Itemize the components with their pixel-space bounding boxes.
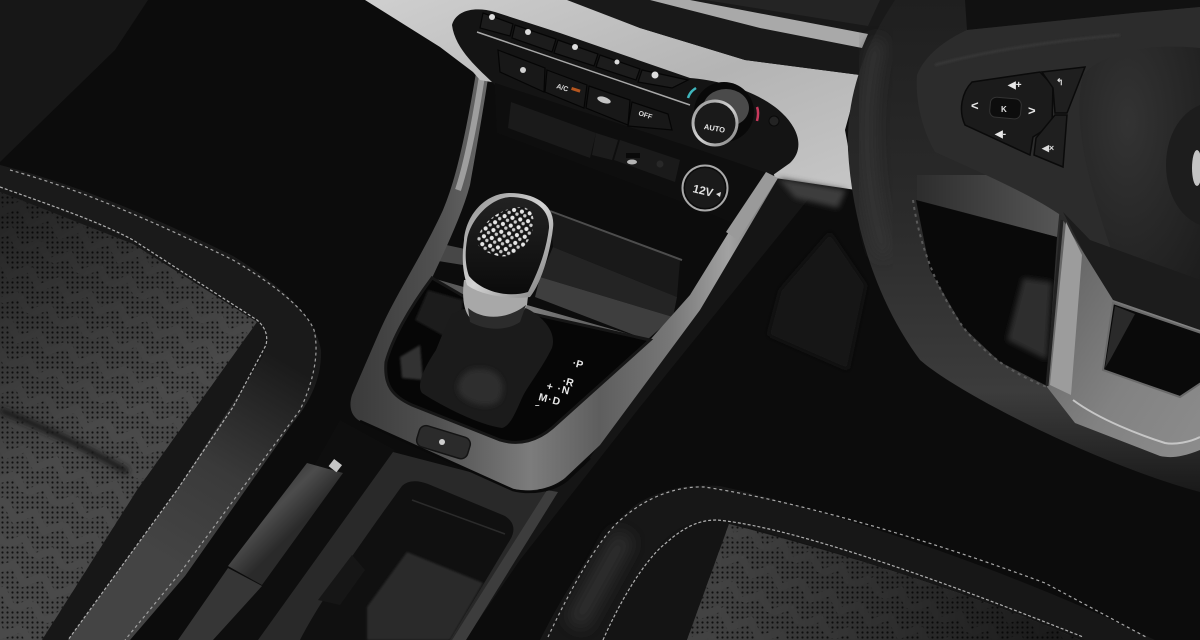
icon 1: [489, 14, 495, 20]
right arrow: >: [1028, 103, 1036, 118]
dark area above spoke pod: [965, 0, 1200, 30]
cup holder: [300, 481, 513, 640]
recirculation icon: [596, 95, 612, 105]
left arrow: <: [971, 98, 979, 113]
button 3: [554, 40, 598, 66]
opening inner side: [1105, 306, 1135, 368]
spoke silver strip: [1050, 222, 1082, 395]
bezel body: [350, 73, 778, 490]
footwell side panel: [768, 232, 866, 370]
gloss reflection: [400, 345, 423, 380]
button 4: [596, 55, 640, 80]
console upper cavity: [432, 75, 778, 345]
well upper left cavity: [415, 290, 463, 345]
right silver rail top: [726, 172, 778, 240]
USB block: [614, 140, 680, 182]
tray top line: [550, 211, 682, 260]
bottom button row: [498, 50, 672, 130]
perforation chevrons: [0, 192, 257, 640]
storage slot: [508, 102, 596, 158]
AC label: A/C: [555, 83, 569, 94]
cup holder floor: [367, 552, 483, 640]
dial cap: [694, 102, 736, 144]
ledge left of knob: [432, 243, 465, 265]
gear well: [386, 278, 650, 442]
tray lower band: [535, 277, 673, 340]
knob black body: [466, 197, 549, 294]
left rail highlight: [458, 76, 482, 190]
off label: OFF: [637, 110, 654, 121]
panel shading: [0, 192, 257, 640]
right seat dark strip: [602, 520, 1085, 640]
gear knob: [463, 193, 553, 329]
cushion seam shadow: [0, 410, 128, 472]
spoke pod: [917, 7, 1200, 300]
perforation dots: [0, 192, 257, 640]
rim highlight: [867, 40, 885, 255]
silver strip: [650, 0, 868, 48]
socket ring: [682, 166, 728, 210]
fan button: [498, 50, 545, 92]
button icon: [439, 439, 445, 445]
aux port: [656, 160, 664, 168]
lever tip: [329, 459, 342, 472]
spoke bright lower line: [1073, 400, 1200, 444]
lever handle: [228, 463, 343, 585]
icon 2: [525, 29, 531, 35]
dial shadow: [694, 82, 754, 142]
dashboard light trim: [365, 0, 860, 190]
parking sensor button: [415, 424, 472, 460]
top button row: [480, 13, 688, 88]
temperature dial: [692, 82, 754, 146]
dial ring: [692, 100, 738, 146]
label M D: M·D: [537, 391, 562, 408]
off button: [628, 102, 672, 130]
small sensor: [769, 116, 779, 126]
USB port: [626, 153, 640, 158]
call accept icon: ↰: [1056, 77, 1064, 87]
steering wheel: [848, 0, 1200, 492]
gear gaiter: [420, 303, 553, 428]
dial label: AUTO: [703, 122, 726, 135]
button 5: [638, 70, 688, 88]
outer stitching: [10, 170, 316, 640]
button body: [415, 424, 472, 460]
hub dome: [1079, 47, 1200, 300]
warm indicator: [757, 107, 758, 121]
panel black body: [452, 9, 798, 225]
label R: ·R: [561, 375, 575, 390]
rim stitching: [913, 200, 1047, 387]
cup holder side notch: [318, 555, 365, 605]
handbrake lever: [178, 459, 343, 640]
centre mode button: [989, 97, 1022, 119]
console top surface: [258, 452, 547, 640]
right panel shading: [687, 524, 1080, 640]
badge edge: [1192, 150, 1200, 186]
seat outer bolster: [0, 165, 321, 640]
shift pattern: [535, 357, 584, 410]
wheel rim: [848, 0, 1200, 492]
top row icons: [489, 14, 658, 78]
dial barrel: [703, 89, 749, 127]
gaiter highlight: [458, 369, 503, 405]
silver and grey console bezel: [350, 73, 778, 492]
mode label: K: [1001, 105, 1007, 114]
top right control: [1042, 67, 1085, 113]
bezel bottom edge: [360, 421, 590, 492]
tray recess: [550, 212, 680, 297]
12V socket: [682, 166, 728, 210]
cool indicator: [688, 88, 696, 98]
grey dash through wheel: [917, 175, 1063, 237]
hub lower band: [1063, 212, 1200, 330]
icon 5: [652, 72, 658, 78]
inner stitching: [0, 187, 267, 640]
bottom right control: [1034, 115, 1067, 167]
pod top highlight: [935, 35, 1120, 65]
right seat inner stitching: [603, 520, 1083, 640]
dash underside: [778, 178, 846, 208]
tray middle face: [540, 247, 677, 317]
seat corner top left: [0, 0, 148, 162]
knob dot pattern: [477, 207, 534, 256]
AC button: [545, 70, 587, 108]
silver collar: [463, 280, 530, 323]
pedal: [1007, 278, 1052, 360]
button 1: [480, 13, 513, 36]
switch block: [592, 133, 618, 160]
label P: ·P: [571, 357, 584, 371]
console right face: [450, 178, 810, 640]
glossy black opening: [386, 278, 650, 442]
bolster highlight: [575, 535, 625, 625]
right seat: [540, 486, 1155, 640]
fabric edge strip: [452, 490, 558, 640]
fan icon: [520, 67, 526, 73]
collar shadow: [468, 305, 526, 329]
socket cap: [685, 168, 725, 208]
USB icon: [627, 160, 637, 164]
right panel chevrons: [687, 524, 1080, 640]
recirculation button: [586, 86, 630, 125]
left control pad: [961, 72, 1053, 155]
climate control panel: [452, 9, 798, 225]
icon 3: [572, 44, 578, 50]
lower console: [215, 420, 558, 640]
upper dash dark panel: [567, 0, 900, 75]
volume up label: ◀+: [1007, 80, 1022, 91]
recess beside lever: [215, 420, 395, 640]
lower panel: [495, 83, 773, 225]
lever boot: [178, 568, 262, 640]
left seat: [0, 165, 321, 640]
right seat bolster: [540, 486, 1155, 640]
steering controls: [961, 67, 1085, 167]
inner dark strip: [0, 187, 266, 640]
mute icon: ◀×: [1041, 143, 1054, 153]
perforated upper panel base: [0, 192, 257, 640]
hub centre recess: [1166, 103, 1200, 227]
dark panel: [567, 0, 900, 75]
right panel dots: [687, 524, 1080, 640]
AC indicator: [571, 87, 581, 93]
knob silver shell: [463, 193, 553, 298]
lower spoke body: [1047, 220, 1200, 457]
volume down label: ◀-: [994, 129, 1006, 140]
perforated right panel base: [687, 524, 1080, 640]
button 2: [512, 25, 556, 52]
cup holder inner rim: [412, 500, 505, 534]
spoke dark edge: [1047, 220, 1062, 386]
icon 4: [614, 60, 620, 64]
tray and storage ledge: [432, 211, 682, 340]
label plus N: + ·N: [545, 380, 572, 398]
socket label: 12V: [691, 183, 714, 200]
spoke opening: [1103, 303, 1200, 397]
right seat outer stitching: [548, 487, 1146, 637]
chrome accent strip: [477, 32, 690, 105]
label minus: –: [535, 401, 540, 410]
footwell opening: [916, 200, 1057, 386]
dark upper surface: [705, 0, 880, 26]
socket arrow: [716, 192, 721, 197]
